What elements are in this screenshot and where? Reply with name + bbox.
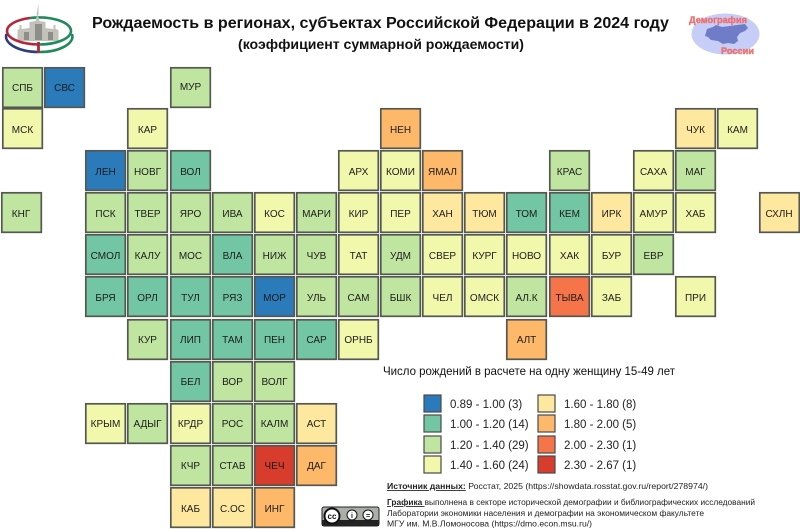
tile: ВОР: ВОР xyxy=(222,377,243,388)
tile: АДЫГ xyxy=(128,404,167,443)
tile: СМОЛ xyxy=(86,235,125,274)
tile: БШК xyxy=(381,277,420,316)
tile: ХАН: ХАН xyxy=(432,209,453,220)
tile: ЧЕЧ: ЧЕЧ xyxy=(264,461,284,472)
tile: АЛТ xyxy=(507,320,546,359)
tile: НОВГ: НОВГ xyxy=(134,167,162,178)
tile: МАРИ xyxy=(297,193,336,232)
icon: CC BY-ND licence badge: cc xyxy=(328,512,337,521)
tile: БЕЛ xyxy=(171,362,210,401)
tile: КУР xyxy=(128,320,167,359)
legend item: 1.60-1.80 xyxy=(538,395,636,412)
tile: МАРИ: МАРИ xyxy=(302,209,331,220)
tile: ЧУК: ЧУК xyxy=(686,125,705,136)
tile: ПЕР xyxy=(381,193,420,232)
tile: СМОЛ: СМОЛ xyxy=(91,251,120,262)
tile: МОС: МОС xyxy=(179,251,202,262)
tile: КАЛУ xyxy=(128,235,167,274)
tile: ДАГ xyxy=(297,446,336,485)
tile: КИР: КИР xyxy=(349,209,369,220)
tile: СВС xyxy=(45,68,84,107)
legend item: 0.89-1.00 xyxy=(424,395,522,412)
tile: АРХ: АРХ xyxy=(349,167,369,178)
tile: ТАТ xyxy=(339,235,378,274)
legend item: 1.40-1.60: 1.40 - 1.60 (24) xyxy=(450,460,529,472)
tile: ХАБ: ХАБ xyxy=(686,209,706,220)
tile: КУРГ: КУРГ xyxy=(472,251,497,262)
tile: МУР: МУР xyxy=(180,82,202,93)
tile: НЕН xyxy=(381,109,420,148)
tile: ПЕР: ПЕР xyxy=(390,209,411,220)
tile: КОС: КОС xyxy=(264,209,285,220)
tile: САМ: САМ xyxy=(347,293,370,304)
tile: ЯМАЛ: ЯМАЛ xyxy=(428,167,457,178)
tile: САХА xyxy=(634,151,673,190)
logo: Demography of Russia: Демография xyxy=(689,15,747,26)
subtitle: (коэффициент суммарной рождаемости) xyxy=(238,37,524,52)
tile: БУР: БУР xyxy=(602,251,622,262)
legend title: Число рождений в расчете на одну женщину 15-49 лет xyxy=(383,364,675,378)
tile: САР xyxy=(297,320,336,359)
tile: РОС: РОС xyxy=(222,419,243,430)
icon: CC BY-ND licence badge xyxy=(322,507,379,526)
tile: ОМСК xyxy=(465,277,504,316)
tile: АМУР xyxy=(634,193,673,232)
tile: УДМ xyxy=(381,235,420,274)
tile: НИЖ xyxy=(255,235,294,274)
tile: ПЕН: ПЕН xyxy=(264,335,285,346)
tile: КЧР: КЧР xyxy=(181,461,200,472)
tile: СПБ: СПБ xyxy=(12,83,33,94)
tile: ЧЕЛ xyxy=(423,277,462,316)
tile: РЯЗ xyxy=(213,277,252,316)
tile: ЗАБ xyxy=(592,277,631,316)
tile: КАМ: КАМ xyxy=(727,125,748,136)
tile: ТУЛ xyxy=(171,277,210,316)
tile: С.ОС xyxy=(213,488,252,527)
tile: ИВА xyxy=(213,193,252,232)
tile: КОС xyxy=(255,193,294,232)
tile: КРАС: КРАС xyxy=(557,167,582,178)
tile: ТЮМ xyxy=(465,193,504,232)
tile: КАР xyxy=(128,109,167,148)
tile: БРЯ: БРЯ xyxy=(95,293,116,304)
tile: ОРЛ: ОРЛ xyxy=(137,293,158,304)
tile: САХА: САХА xyxy=(640,167,667,178)
logo: MSU building with rings xyxy=(6,3,72,53)
legend item: 1.20-1.40: 1.20 - 1.40 (29) xyxy=(450,440,529,452)
tile: ИРК: ИРК xyxy=(602,209,622,220)
legend item: 1.20-1.40 xyxy=(424,436,529,453)
tile: ДАГ: ДАГ xyxy=(307,461,327,472)
tile: МАГ: МАГ xyxy=(685,167,706,178)
logo: Demography of Russia xyxy=(689,14,760,57)
data source and credits: МГУ им. М.В.Ломоносова (https://dmo.econ.msu.ru/) xyxy=(387,518,592,528)
tile: КРДР xyxy=(171,404,210,443)
data source and credits: Лаборатории экономики населения и демографии на экономическом факультете xyxy=(387,508,704,518)
legend item: 1.00-1.20 xyxy=(424,415,529,432)
tile: КЕМ xyxy=(550,193,589,232)
tile: ВОЛ xyxy=(171,151,210,190)
legend item: 2.30-2.67 xyxy=(538,456,636,473)
tile: ТОМ: ТОМ xyxy=(516,209,537,220)
tile: УЛЬ xyxy=(297,277,336,316)
tile: КАМ xyxy=(718,109,757,148)
tile: КАР: КАР xyxy=(138,125,157,136)
legend item: 0.89-1.00: 0.89 - 1.00 (3) xyxy=(450,399,522,411)
tile: ТЮМ: ТЮМ xyxy=(472,209,497,220)
tile: МСК xyxy=(3,109,42,148)
tile: РОС xyxy=(213,404,252,443)
tile: ТВЕР: ТВЕР xyxy=(134,209,161,220)
tile: ОРНБ xyxy=(339,320,378,359)
tile: ЛЕН: ЛЕН xyxy=(95,167,116,178)
tile: НОВГ xyxy=(128,151,167,190)
tile: СХЛН: СХЛН xyxy=(765,209,793,220)
tile: БРЯ xyxy=(86,277,125,316)
tile: ХАК xyxy=(550,235,589,274)
tile: ЗАБ: ЗАБ xyxy=(602,293,622,304)
tile: АЛ.К xyxy=(507,277,546,316)
tile: НОВО xyxy=(507,235,546,274)
legend item: 1.00-1.20: 1.00 - 1.20 (14) xyxy=(450,419,529,431)
tile: ТВЕР xyxy=(128,193,167,232)
legend item: 1.80-2.00: 1.80 - 2.00 (5) xyxy=(564,419,636,431)
tile: ИРК xyxy=(592,193,631,232)
tile: ПРИ xyxy=(676,277,715,316)
tile: ТОМ xyxy=(507,193,546,232)
tile: МОС xyxy=(171,235,210,274)
tile: ЯМАЛ xyxy=(423,151,462,190)
tile: СХЛН xyxy=(760,193,799,232)
tile: СВС: СВС xyxy=(54,83,75,94)
tile: НИЖ: НИЖ xyxy=(263,251,287,262)
tile: ОМСК: ОМСК xyxy=(470,293,499,304)
tile: ТАМ xyxy=(213,320,252,359)
tile: КУР: КУР xyxy=(138,335,157,346)
tile: МОР xyxy=(255,277,294,316)
legend item: 2.00-2.30: 2.00 - 2.30 (1) xyxy=(564,440,636,452)
tile: КЧР xyxy=(171,446,210,485)
tile: НЕН: НЕН xyxy=(390,125,411,136)
tile: АДЫГ: АДЫГ xyxy=(133,419,162,430)
legend item: 2.00-2.30 xyxy=(538,436,636,453)
tile: НОВО: НОВО xyxy=(512,251,541,262)
tile: КОМИ: КОМИ xyxy=(386,167,415,178)
tile: ИВА: ИВА xyxy=(222,209,243,220)
icon: CC BY-ND licence badge: i xyxy=(351,513,353,520)
tile: ЯРО xyxy=(171,193,210,232)
data source and credits: Графика выполнена в секторе исторической демографии и библиографических исследований xyxy=(387,497,755,507)
legend item: 1.80-2.00 xyxy=(538,415,636,432)
tile: ЧЕЛ: ЧЕЛ xyxy=(433,293,452,304)
tile: КРЫМ xyxy=(86,404,125,443)
tile: ПРИ: ПРИ xyxy=(685,293,706,304)
legend item: 2.30-2.67: 2.30 - 2.67 (1) xyxy=(564,460,636,472)
tile: ЯРО: ЯРО xyxy=(180,209,201,220)
tile: ПЕН xyxy=(255,320,294,359)
tile: КЕМ: КЕМ xyxy=(559,209,580,220)
tile: АЛ.К: АЛ.К xyxy=(515,293,538,304)
tile: КАБ xyxy=(171,488,210,527)
tile: КИР xyxy=(339,193,378,232)
tile: ВЛА: ВЛА xyxy=(223,251,243,262)
tile: СТАВ xyxy=(213,446,252,485)
tile: ЕВР xyxy=(634,235,673,274)
tile: КРЫМ: КРЫМ xyxy=(91,419,120,430)
tile: КНГ xyxy=(2,193,41,232)
tile: ЧУВ xyxy=(297,235,336,274)
tile: ЛЕН xyxy=(86,151,125,190)
tile: КУРГ xyxy=(465,235,504,274)
tile: КРДР: КРДР xyxy=(178,419,203,430)
tile: МУР xyxy=(171,68,210,107)
tile: ТАМ: ТАМ xyxy=(222,335,243,346)
tile: АЛТ: АЛТ xyxy=(517,335,536,346)
tile: АСТ: АСТ xyxy=(307,419,326,430)
tile: БУР xyxy=(592,235,631,274)
legend item: 1.40-1.60 xyxy=(424,456,529,473)
tile: ЧЕЧ xyxy=(255,446,294,485)
tile: МСК: МСК xyxy=(12,125,33,136)
tile: ВЛА xyxy=(213,235,252,274)
tile: ОРНБ: ОРНБ xyxy=(344,335,373,346)
tile: БШК: БШК xyxy=(390,293,411,304)
icon: CC BY-ND licence badge: = xyxy=(366,513,370,520)
tile: СПБ xyxy=(3,68,42,107)
title: Рождаемость в регионах, субъектах Российской Федерации в 2024 году xyxy=(92,15,669,32)
tile: РЯЗ: РЯЗ xyxy=(223,293,242,304)
tile: ЛИП xyxy=(171,320,210,359)
tile: АРХ xyxy=(339,151,378,190)
tile: ИНГ xyxy=(255,488,294,527)
tile: КАЛУ: КАЛУ xyxy=(135,251,161,262)
tile: МАГ xyxy=(676,151,715,190)
tile: ВОЛГ xyxy=(255,362,294,401)
tile: САМ xyxy=(339,277,378,316)
tile: СТАВ: СТАВ xyxy=(219,461,246,472)
tile: АСТ xyxy=(297,404,336,443)
tile: ВОР xyxy=(213,362,252,401)
tile: КРАС xyxy=(550,151,589,190)
tile: ПСК: ПСК xyxy=(95,209,116,220)
legend item: 1.60-1.80: 1.60 - 1.80 (8) xyxy=(564,399,636,411)
tile: ТАТ: ТАТ xyxy=(350,251,367,262)
tile: ТЫВА xyxy=(550,277,589,316)
tile: КАЛМ: КАЛМ xyxy=(261,419,288,430)
legend xyxy=(424,395,636,473)
tile: СВЕР xyxy=(423,235,462,274)
tile: УДМ: УДМ xyxy=(390,251,411,262)
tile: ХАН xyxy=(423,193,462,232)
tile: ВОЛ: ВОЛ xyxy=(180,167,201,178)
tile: КОМИ xyxy=(381,151,420,190)
tile: ЧУВ: ЧУВ xyxy=(307,251,327,262)
tile: ХАК: ХАК xyxy=(560,251,579,262)
tile: КАЛМ xyxy=(255,404,294,443)
tile: ТУЛ: ТУЛ xyxy=(181,293,200,304)
tile: ТЫВА: ТЫВА xyxy=(556,293,584,304)
tile: КНГ: КНГ xyxy=(12,209,31,220)
tile: САР: САР xyxy=(306,335,327,346)
data source and credits xyxy=(387,481,755,528)
data source and credits: Источник данных: Росстат, 2025 (https://showdata.rosstat.gov.ru/report/278974/) xyxy=(387,481,708,491)
tile: ЧУК xyxy=(676,109,715,148)
logo: Demography of Russia: России xyxy=(721,46,754,57)
tile: ЛИП: ЛИП xyxy=(180,335,201,346)
tile: С.ОС: С.ОС xyxy=(220,504,245,515)
tile: ИНГ: ИНГ xyxy=(265,504,285,515)
tile: ЕВР: ЕВР xyxy=(643,251,664,262)
tile: КАБ: КАБ xyxy=(181,504,200,515)
tile: СВЕР: СВЕР xyxy=(429,251,456,262)
tile: ОРЛ xyxy=(128,277,167,316)
tile: УЛЬ: УЛЬ xyxy=(307,293,327,304)
tile: МОР: МОР xyxy=(263,293,286,304)
tile: ПСК xyxy=(86,193,125,232)
tile: АМУР: АМУР xyxy=(639,209,668,220)
tile: ХАБ xyxy=(676,193,715,232)
tile: БЕЛ: БЕЛ xyxy=(181,377,200,388)
tile: ВОЛГ: ВОЛГ xyxy=(262,377,288,388)
